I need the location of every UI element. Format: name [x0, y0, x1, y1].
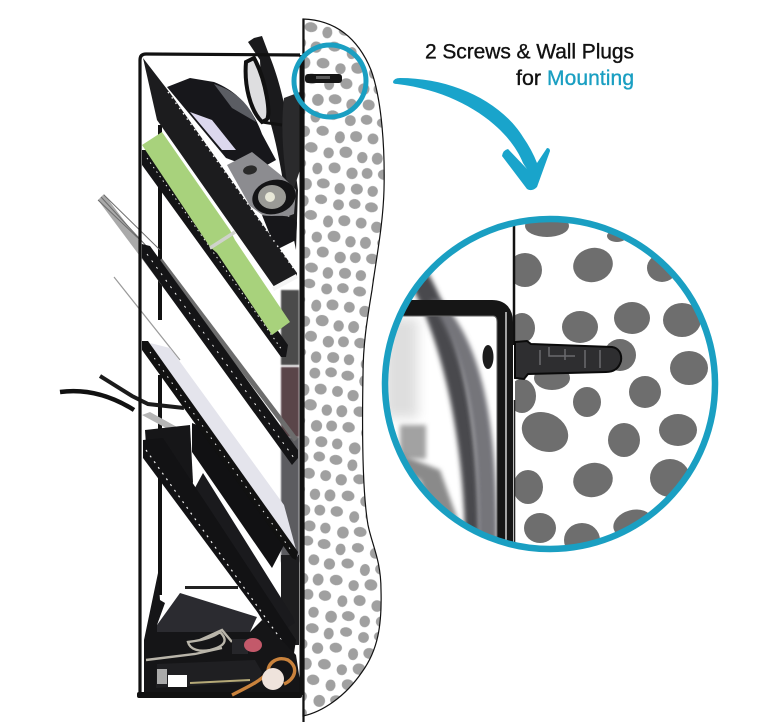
screw head: [482, 345, 494, 369]
shelf 4: [142, 341, 298, 560]
caption: for: [516, 67, 541, 90]
wall with speckled pattern: [303, 19, 384, 722]
black laptop: [145, 425, 295, 637]
shelf 3: [142, 244, 298, 465]
caption: [425, 40, 634, 90]
blurred organizer contents: [388, 274, 496, 536]
bottom tray: [137, 573, 302, 698]
icon: hanging glasses: [246, 36, 300, 250]
orange earphones: [232, 659, 295, 695]
enlarged wall plug: [515, 341, 621, 379]
papers on shelf 3: [98, 194, 296, 452]
icon: flashlight: [227, 152, 300, 250]
small wall plug: [305, 74, 342, 83]
green folder: [142, 132, 290, 335]
caption: Mounting: [547, 67, 634, 90]
white sheet of paper: [150, 343, 298, 557]
phone or tablet in tray: [157, 586, 257, 632]
laptop under white sheet: [192, 423, 284, 568]
back supports: [158, 125, 299, 645]
shelf 2: [142, 150, 288, 357]
wall edge line: [513, 220, 515, 345]
wall spots: [508, 215, 708, 557]
cable and clip: [60, 376, 188, 440]
magnified detail circle: [384, 215, 715, 557]
frame bar: [403, 300, 516, 542]
organizer with stored items: [60, 36, 302, 698]
curved arrow: [393, 78, 550, 190]
metal frame: [140, 54, 301, 695]
lipstick: [232, 638, 262, 654]
keys: [146, 630, 232, 660]
caption: 2 Screws & Wall Plugs: [425, 40, 634, 64]
car key fob: [156, 660, 262, 688]
icon: sunglasses: [167, 78, 276, 170]
small highlight circle: [294, 45, 366, 117]
shelf 5: [143, 438, 296, 660]
shelf 1: [143, 58, 298, 291]
